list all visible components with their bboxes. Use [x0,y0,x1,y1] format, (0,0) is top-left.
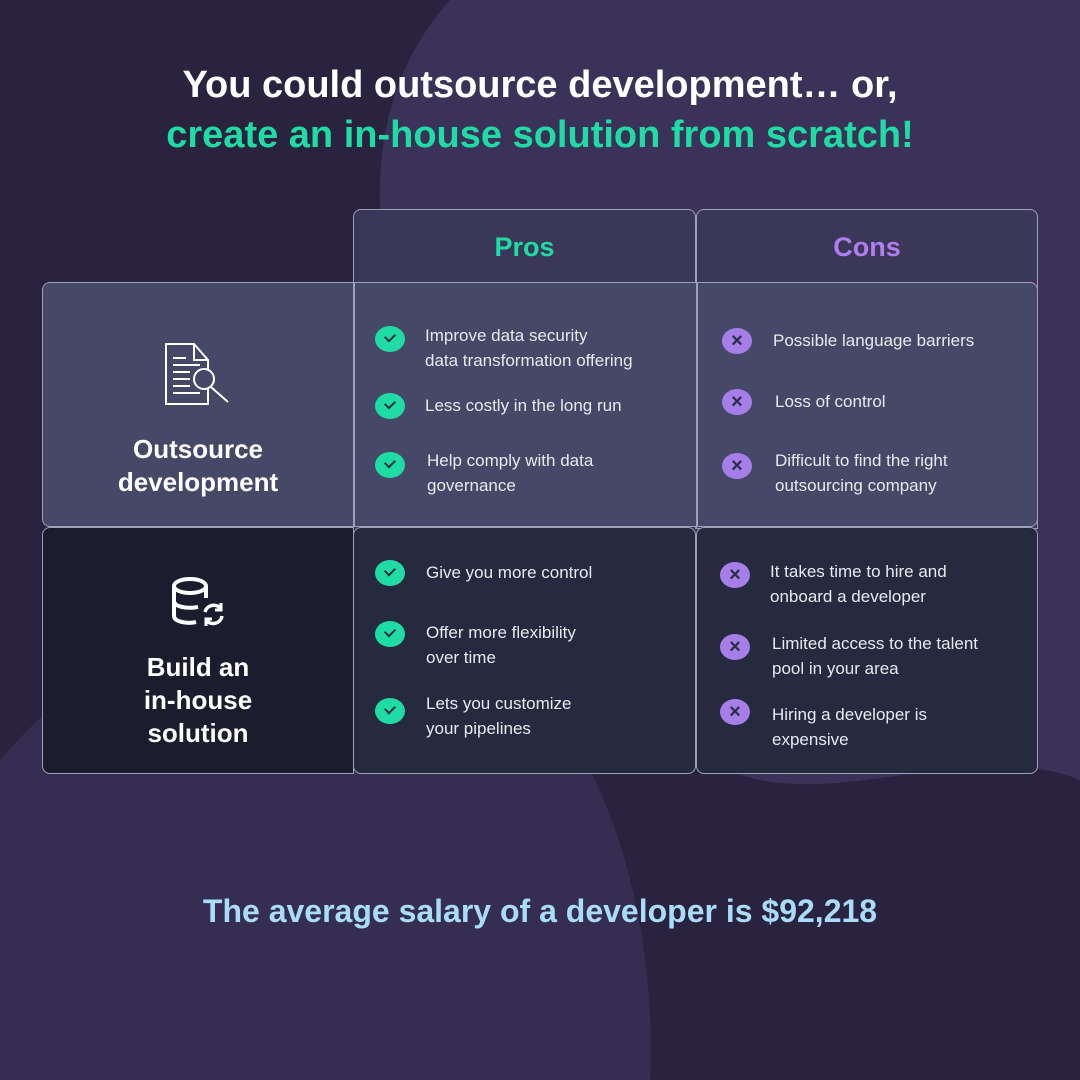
text: pool in your area [772,659,899,678]
title: You could outsource development… or, [182,64,898,106]
text: Limited access to the talent [772,634,978,653]
text: expensive [772,730,849,749]
title [166,64,914,156]
label: build in-house: solution [147,718,249,748]
text: Improve data security [425,326,588,345]
header: Pros [353,209,696,529]
label: outsource development: Outsource [133,434,263,464]
text: Give you more control [426,563,592,582]
text: outsourcing company [775,476,937,495]
text: Offer more flexibility [426,623,576,642]
text: your pipelines [426,719,531,738]
text: Help comply with data [427,451,593,470]
header: Cons: Cons [833,232,901,262]
cons list outsource [722,328,974,495]
text: Hiring a developer is [772,705,927,724]
header: Cons [696,209,1038,529]
pros list in-house [375,560,592,738]
text: Loss of control [775,392,886,411]
header: Pros: Pros [494,232,555,262]
pros list outsource [375,326,633,495]
label: outsource development: development [118,467,278,497]
row 1: outsource [42,282,1038,527]
text: It takes time to hire and [770,562,947,581]
label: outsource development [118,434,278,497]
label: build in-house [144,652,252,748]
text: Difficult to find the right [775,451,948,470]
text: governance [427,476,516,495]
text: Less costly in the long run [425,396,622,415]
label: build in-house: in-house [144,685,252,715]
text: data transformation offering [425,351,633,370]
text: Lets you customize [426,694,572,713]
row 2: in-house [42,527,354,774]
text: Possible language barriers [773,331,974,350]
title: create an in-house solution from scratch! [166,114,914,156]
footer: salary stat: The average salary of a developer is $92,218 [203,893,877,929]
text: over time [426,648,496,667]
icon: document magnifier [165,343,229,405]
text: onboard a developer [770,587,926,606]
icon: database sync [172,577,224,626]
label: build in-house: Build an [147,652,249,682]
cons list in-house [720,562,978,749]
